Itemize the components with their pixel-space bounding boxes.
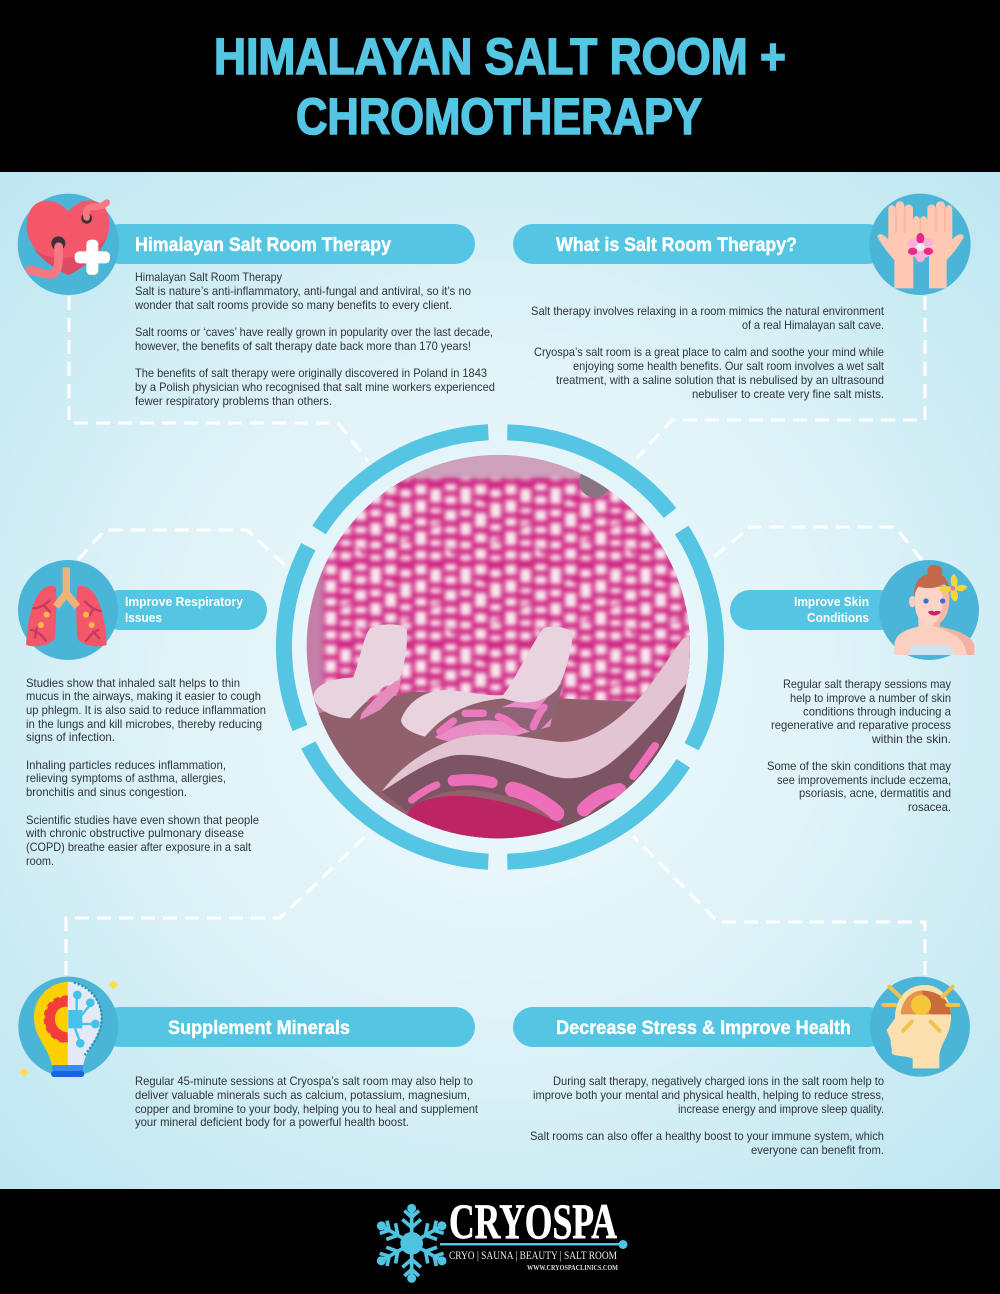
panel: Himalayan Salt Room Therapy	[18, 194, 495, 408]
dashed connector lines	[66, 296, 925, 975]
title: HIMALAYAN SALT ROOM +	[214, 28, 786, 85]
background	[0, 172, 1000, 1189]
body text: nebuliser to create very fine salt mists.	[692, 388, 884, 401]
icon: snowflake	[374, 1206, 449, 1281]
icon: light bulb with gear and circuit	[18, 977, 118, 1077]
body text: During salt therapy, negatively charged ions in the salt room help to	[553, 1075, 884, 1088]
body text: wonder that salt rooms provide so many benefits to every client.	[134, 299, 452, 312]
body text: in the lungs and kill microbes, thereby reducing	[26, 718, 262, 731]
header band	[0, 0, 1000, 172]
body text: regenerative and reparative process	[771, 719, 951, 732]
salt brick wall	[323, 478, 693, 702]
body text: your mineral deficient body for a powerful health boost.	[135, 1116, 409, 1129]
logo: Cryospa: WWW.CRYOSPACLINICS.COM	[527, 1263, 618, 1272]
heading pill	[100, 224, 475, 264]
body text: Some of the skin conditions that may	[767, 760, 951, 773]
body text: within the skin.	[871, 733, 951, 746]
body text: deliver valuable minerals such as calcium, potassium, magnesium,	[135, 1089, 470, 1102]
body text	[134, 271, 495, 408]
body text: Cryospa’s salt room is a great place to calm and soothe your mind while	[534, 346, 884, 359]
heading pill	[513, 1007, 888, 1047]
panel: What is Salt Room Therapy?	[513, 194, 971, 401]
body text	[531, 305, 885, 401]
carpet floor	[318, 690, 685, 838]
body text: signs of infection.	[26, 731, 115, 744]
heading pill: Issues	[125, 611, 162, 625]
body text: of a real Himalayan salt cave.	[742, 319, 884, 332]
segmented ring around the photo	[284, 432, 716, 862]
heading pill: Himalayan Salt Room Therapy	[135, 235, 391, 256]
body text: however, the benefits of salt therapy date back more than 170 years!	[135, 340, 471, 353]
heading pill: Decrease Stress & Improve Health	[556, 1018, 851, 1039]
heading pill: Conditions	[807, 611, 869, 625]
body text	[25, 677, 266, 868]
logo: Cryospa: CRYOSPA	[449, 1193, 617, 1249]
heading pill: Improve Skin	[794, 595, 869, 609]
body text: see improvements include eczema,	[777, 774, 951, 787]
body text: Himalayan Salt Room Therapy	[135, 271, 282, 284]
body text: mucus in the airways, making it easier to cough	[26, 690, 261, 703]
body text: enjoying some health benefits. Our salt room involves a wet salt	[573, 360, 885, 373]
body text: rosacea.	[908, 801, 951, 814]
body text: by a Polish physician who recognised that salt mine workers experienced	[135, 381, 495, 394]
body text: treatment, with a saline solution that is nebulised by an ultrasound	[556, 374, 884, 387]
body text: increase energy and improve sleep quality.	[678, 1103, 884, 1116]
body text: conditions through inducing a	[803, 706, 952, 718]
body text: bronchitis and sinus congestion.	[26, 786, 187, 799]
body text: Salt rooms can also offer a healthy boost to your immune system, which	[530, 1130, 884, 1143]
logo: Cryospa: CRYO | SAUNA | BEAUTY | SALT ROOM	[449, 1248, 617, 1262]
heading pill: Improve Respiratory	[125, 595, 243, 609]
icon: woman with flower	[879, 560, 979, 660]
body text: The benefits of salt therapy were originally discovered in Poland in 1843	[135, 367, 487, 380]
wall badge	[579, 474, 608, 498]
body text: Regular 45-minute sessions at Cryospa’s salt room may also help to	[135, 1075, 473, 1088]
icon: hands holding flower	[869, 194, 971, 295]
body text: relieving symptoms of asthma, allergies,	[26, 772, 226, 785]
icon: heart with tubes and plus	[18, 194, 119, 295]
icon: lungs	[18, 560, 118, 660]
body text: improve both your mental and physical health, helping to reduce stress,	[533, 1089, 884, 1102]
lounger: rear	[313, 624, 407, 720]
heading pill: Supplement Minerals	[168, 1018, 350, 1039]
panel: Supplement Minerals	[18, 977, 479, 1129]
body text: (COPD) breathe easier after exposure in a salt	[26, 841, 252, 854]
panel: Improve Skin Conditions	[730, 560, 979, 814]
heading pill	[100, 590, 267, 630]
body text: fewer respiratory problems than others.	[135, 395, 332, 408]
body text: Regular salt therapy sessions may	[783, 678, 951, 691]
central photo: salt room with loungers	[303, 453, 697, 843]
body text: Salt is nature’s anti-inflammatory, anti-fungal and antiviral, so it’s no	[135, 285, 471, 298]
body text	[530, 1075, 884, 1157]
body text: Inhaling particles reduces inflammation,	[26, 759, 226, 772]
footer band	[0, 1189, 1000, 1294]
lounger: middle	[401, 627, 573, 743]
body text: Studies show that inhaled salt helps to thin	[26, 677, 240, 690]
title: CHROMOTHERAPY	[296, 88, 702, 145]
logo: Cryospa	[374, 1193, 628, 1281]
heading pill	[100, 1007, 475, 1047]
body text: help to improve a number of skin	[790, 692, 951, 705]
body text	[135, 1075, 479, 1129]
body text: psoriasis, acne, dermatitis and	[799, 787, 951, 800]
body text: everyone can benefit from.	[751, 1144, 884, 1157]
lounger: front	[382, 635, 691, 833]
body text: Scientific studies have even shown that people	[26, 814, 259, 827]
body text: copper and bromine to your body, helping you to heal and supplement	[135, 1103, 479, 1116]
body text	[767, 678, 952, 814]
body text: up phlegm. It is also said to reduce inflammation	[26, 704, 266, 717]
heading pill: What is Salt Room Therapy?	[556, 235, 797, 256]
panel: Improve Respiratory Issues	[18, 560, 267, 868]
panel: Decrease Stress & Improve Health	[513, 977, 970, 1157]
heading pill	[730, 590, 900, 630]
title	[214, 28, 786, 145]
body text: room.	[26, 855, 54, 868]
icon: head with glowing mind	[870, 977, 970, 1077]
body text: Salt rooms or ‘caves’ have really grown in popularity over the last decade,	[135, 326, 493, 339]
body text: with chronic obstructive pulmonary disease	[25, 827, 244, 840]
heading pill	[513, 224, 888, 264]
body text: Salt therapy involves relaxing in a room mimics the natural environment	[531, 305, 885, 318]
